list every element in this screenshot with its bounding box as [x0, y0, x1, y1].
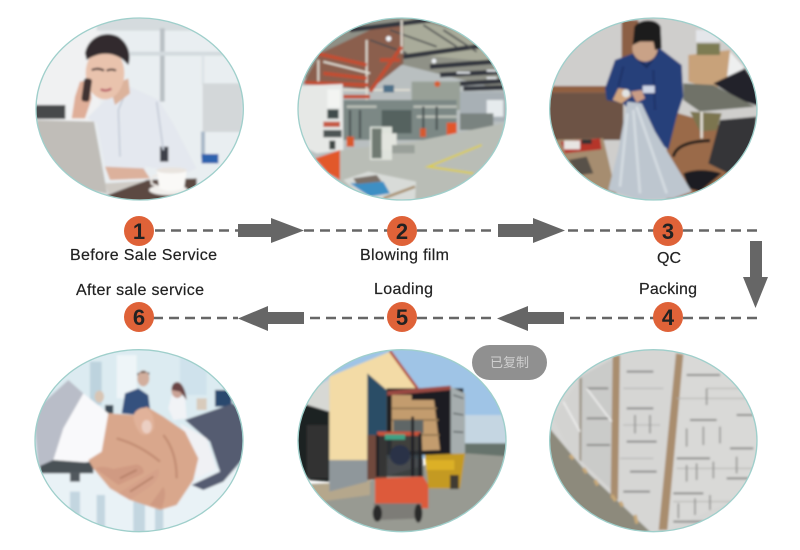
cabinet: [688, 50, 730, 90]
copied toast: 已复制: [490, 355, 529, 370]
table at lower left: [556, 137, 618, 194]
hands: [88, 407, 198, 510]
right cuff: [181, 424, 216, 470]
step 1 marker: [124, 216, 154, 246]
film bag: [608, 102, 692, 200]
pallets: [553, 378, 580, 460]
forklift body: [375, 477, 428, 508]
chair: [708, 117, 757, 173]
printed box text marks: [587, 372, 757, 522]
copied toast: [472, 345, 547, 380]
floor: [666, 112, 730, 198]
step 2 marker: [387, 216, 417, 246]
white cuff: [53, 393, 108, 462]
step 2 marker: 2: [396, 219, 408, 244]
step 3 marker: [653, 216, 683, 246]
label: loading: Loading: [374, 281, 433, 298]
photo: packed pallets: [540, 345, 770, 545]
white rack: [370, 127, 392, 160]
container: [387, 388, 463, 455]
step 5 marker: 5: [396, 305, 408, 330]
step 4 marker: 4: [662, 305, 675, 330]
dashed connector: top row: [155, 229, 757, 232]
shirt: [88, 108, 100, 124]
lower blurred floor: [43, 468, 237, 530]
arrow: step 5 to 6: [238, 306, 304, 331]
people in background: [122, 388, 150, 415]
step 5 marker: [387, 302, 417, 332]
forklift mast and cab: [377, 433, 423, 477]
ground: [310, 452, 504, 531]
photo: handshake after sale: [34, 349, 244, 532]
distant trees: [465, 443, 508, 457]
arrow: step 3 to 4: [743, 241, 768, 308]
ceiling: [305, 18, 502, 88]
step 6 marker: 6: [133, 305, 145, 330]
laptop: [36, 120, 107, 194]
arrow: step 1 to 2: [238, 218, 304, 243]
steel frame orange: [318, 20, 410, 110]
back wall: [460, 92, 510, 122]
step 3 marker: 3: [662, 219, 674, 244]
arrow: step 2 to 3: [498, 218, 565, 243]
control cabinet: [297, 84, 343, 153]
photo: customer service agent on phone: [35, 17, 244, 201]
label: blowing film: Blowing film: [360, 247, 449, 264]
yellow truck tail: [425, 453, 465, 488]
step 1 marker: 1: [133, 219, 145, 244]
photo: film blowing factory: [297, 17, 507, 201]
hair: [85, 34, 130, 65]
label: before sale service: Before Sale Service: [70, 247, 217, 264]
wooden pallet feet: [570, 455, 637, 524]
glass table: [683, 83, 755, 112]
concrete floor: [547, 425, 650, 545]
warehouse: [303, 378, 329, 412]
step 4 marker: [653, 302, 683, 332]
cargo: [392, 395, 440, 452]
table in foreground: [344, 171, 416, 200]
cup: [149, 185, 188, 195]
dashed connector: bottom row: [153, 317, 757, 319]
vertical brown corner boards: [611, 355, 620, 500]
arrow: step 4 to 5: [497, 306, 564, 331]
photo: forklift loading container: [297, 349, 507, 532]
right sleeve: [185, 403, 247, 490]
table: [106, 177, 198, 200]
neck and face: [110, 78, 130, 105]
label: after sale service: After sale service: [76, 282, 204, 299]
left sleeve: [33, 380, 83, 467]
sky: [320, 350, 502, 460]
orange base: [315, 150, 340, 180]
arm, hand and phone: [72, 80, 92, 118]
machinery: [343, 100, 457, 140]
worker: [605, 48, 683, 150]
photo: QC worker inspecting film: [549, 17, 758, 201]
label: QC: QC: [657, 250, 681, 267]
label: packing: Packing: [639, 281, 697, 298]
floor: [340, 124, 502, 198]
step 6 marker: [124, 302, 154, 332]
